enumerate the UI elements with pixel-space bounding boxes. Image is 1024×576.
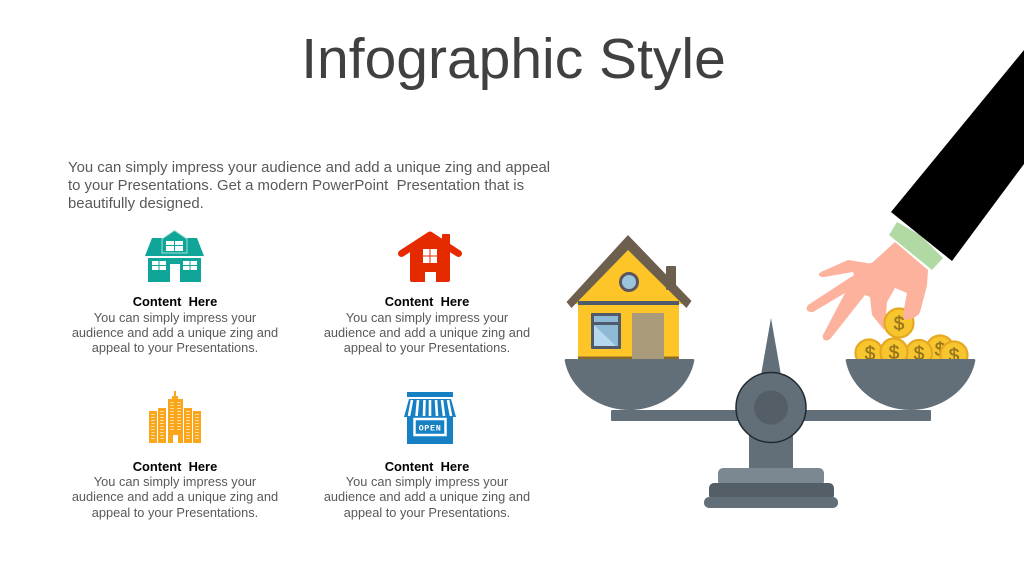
body text: appeal to your Presentations.	[92, 505, 258, 520]
thumb tip	[903, 285, 927, 320]
right pan	[846, 359, 975, 410]
icon: red house	[402, 234, 458, 282]
cuff	[889, 222, 943, 270]
intro text block	[68, 160, 550, 212]
scale	[565, 318, 975, 508]
panel: content item 4	[324, 392, 530, 520]
coins on right pan: $	[914, 344, 925, 365]
pivot	[736, 372, 806, 442]
stepped base	[704, 468, 838, 508]
body text	[324, 474, 530, 520]
heading: Content Here	[385, 294, 469, 309]
panel: content item 3	[72, 391, 278, 520]
post	[749, 430, 793, 470]
body text: audience and add a unique zing and	[324, 325, 530, 340]
coins on right pan	[854, 334, 969, 359]
coins on right pan: $	[865, 344, 876, 365]
coin: $	[894, 314, 905, 335]
body text: You can simply impress your	[94, 310, 257, 325]
panel: content item 2	[324, 234, 530, 355]
coin	[884, 308, 914, 338]
body text: You can simply impress your	[94, 474, 257, 489]
body text: appeal to your Presentations.	[344, 505, 510, 520]
body text: audience and add a unique zing and	[324, 489, 530, 504]
heading: Content Here	[385, 459, 469, 474]
body text	[72, 310, 278, 355]
body text: audience and add a unique zing and	[72, 489, 278, 504]
intro text block: beautifully designed.	[68, 196, 204, 212]
body text: audience and add a unique zing and	[72, 325, 278, 340]
body text: appeal to your Presentations.	[92, 340, 258, 355]
intro text block: to your Presentations. Get a modern PowerPoint Presentation that is	[68, 178, 524, 194]
panel: content item 1	[72, 230, 278, 355]
sleeve	[891, 50, 1024, 261]
heading: Content Here	[133, 459, 217, 474]
body text: You can simply impress your	[346, 310, 509, 325]
hand with coin	[806, 50, 1024, 340]
icon: teal house	[145, 230, 204, 282]
body text	[324, 310, 530, 355]
body text: appeal to your Presentations.	[344, 340, 510, 355]
body text: You can simply impress your	[346, 474, 509, 489]
hand	[806, 242, 928, 340]
coins on right pan: $	[935, 340, 946, 361]
spike	[761, 318, 781, 375]
icon: blue open shop	[404, 392, 456, 444]
icon: orange buildings	[149, 391, 201, 443]
beam	[611, 410, 931, 421]
coins on right pan: $	[949, 346, 960, 367]
title: Infographic Style	[301, 27, 726, 91]
body text	[72, 474, 278, 520]
icon: blue open shop: OPEN	[419, 424, 441, 434]
intro text block: You can simply impress your audience and add a unique zing and appeal	[68, 160, 550, 176]
left pan	[565, 359, 694, 410]
house on left pan	[566, 235, 692, 360]
heading: Content Here	[133, 294, 217, 309]
coins on right pan: $	[889, 343, 900, 364]
